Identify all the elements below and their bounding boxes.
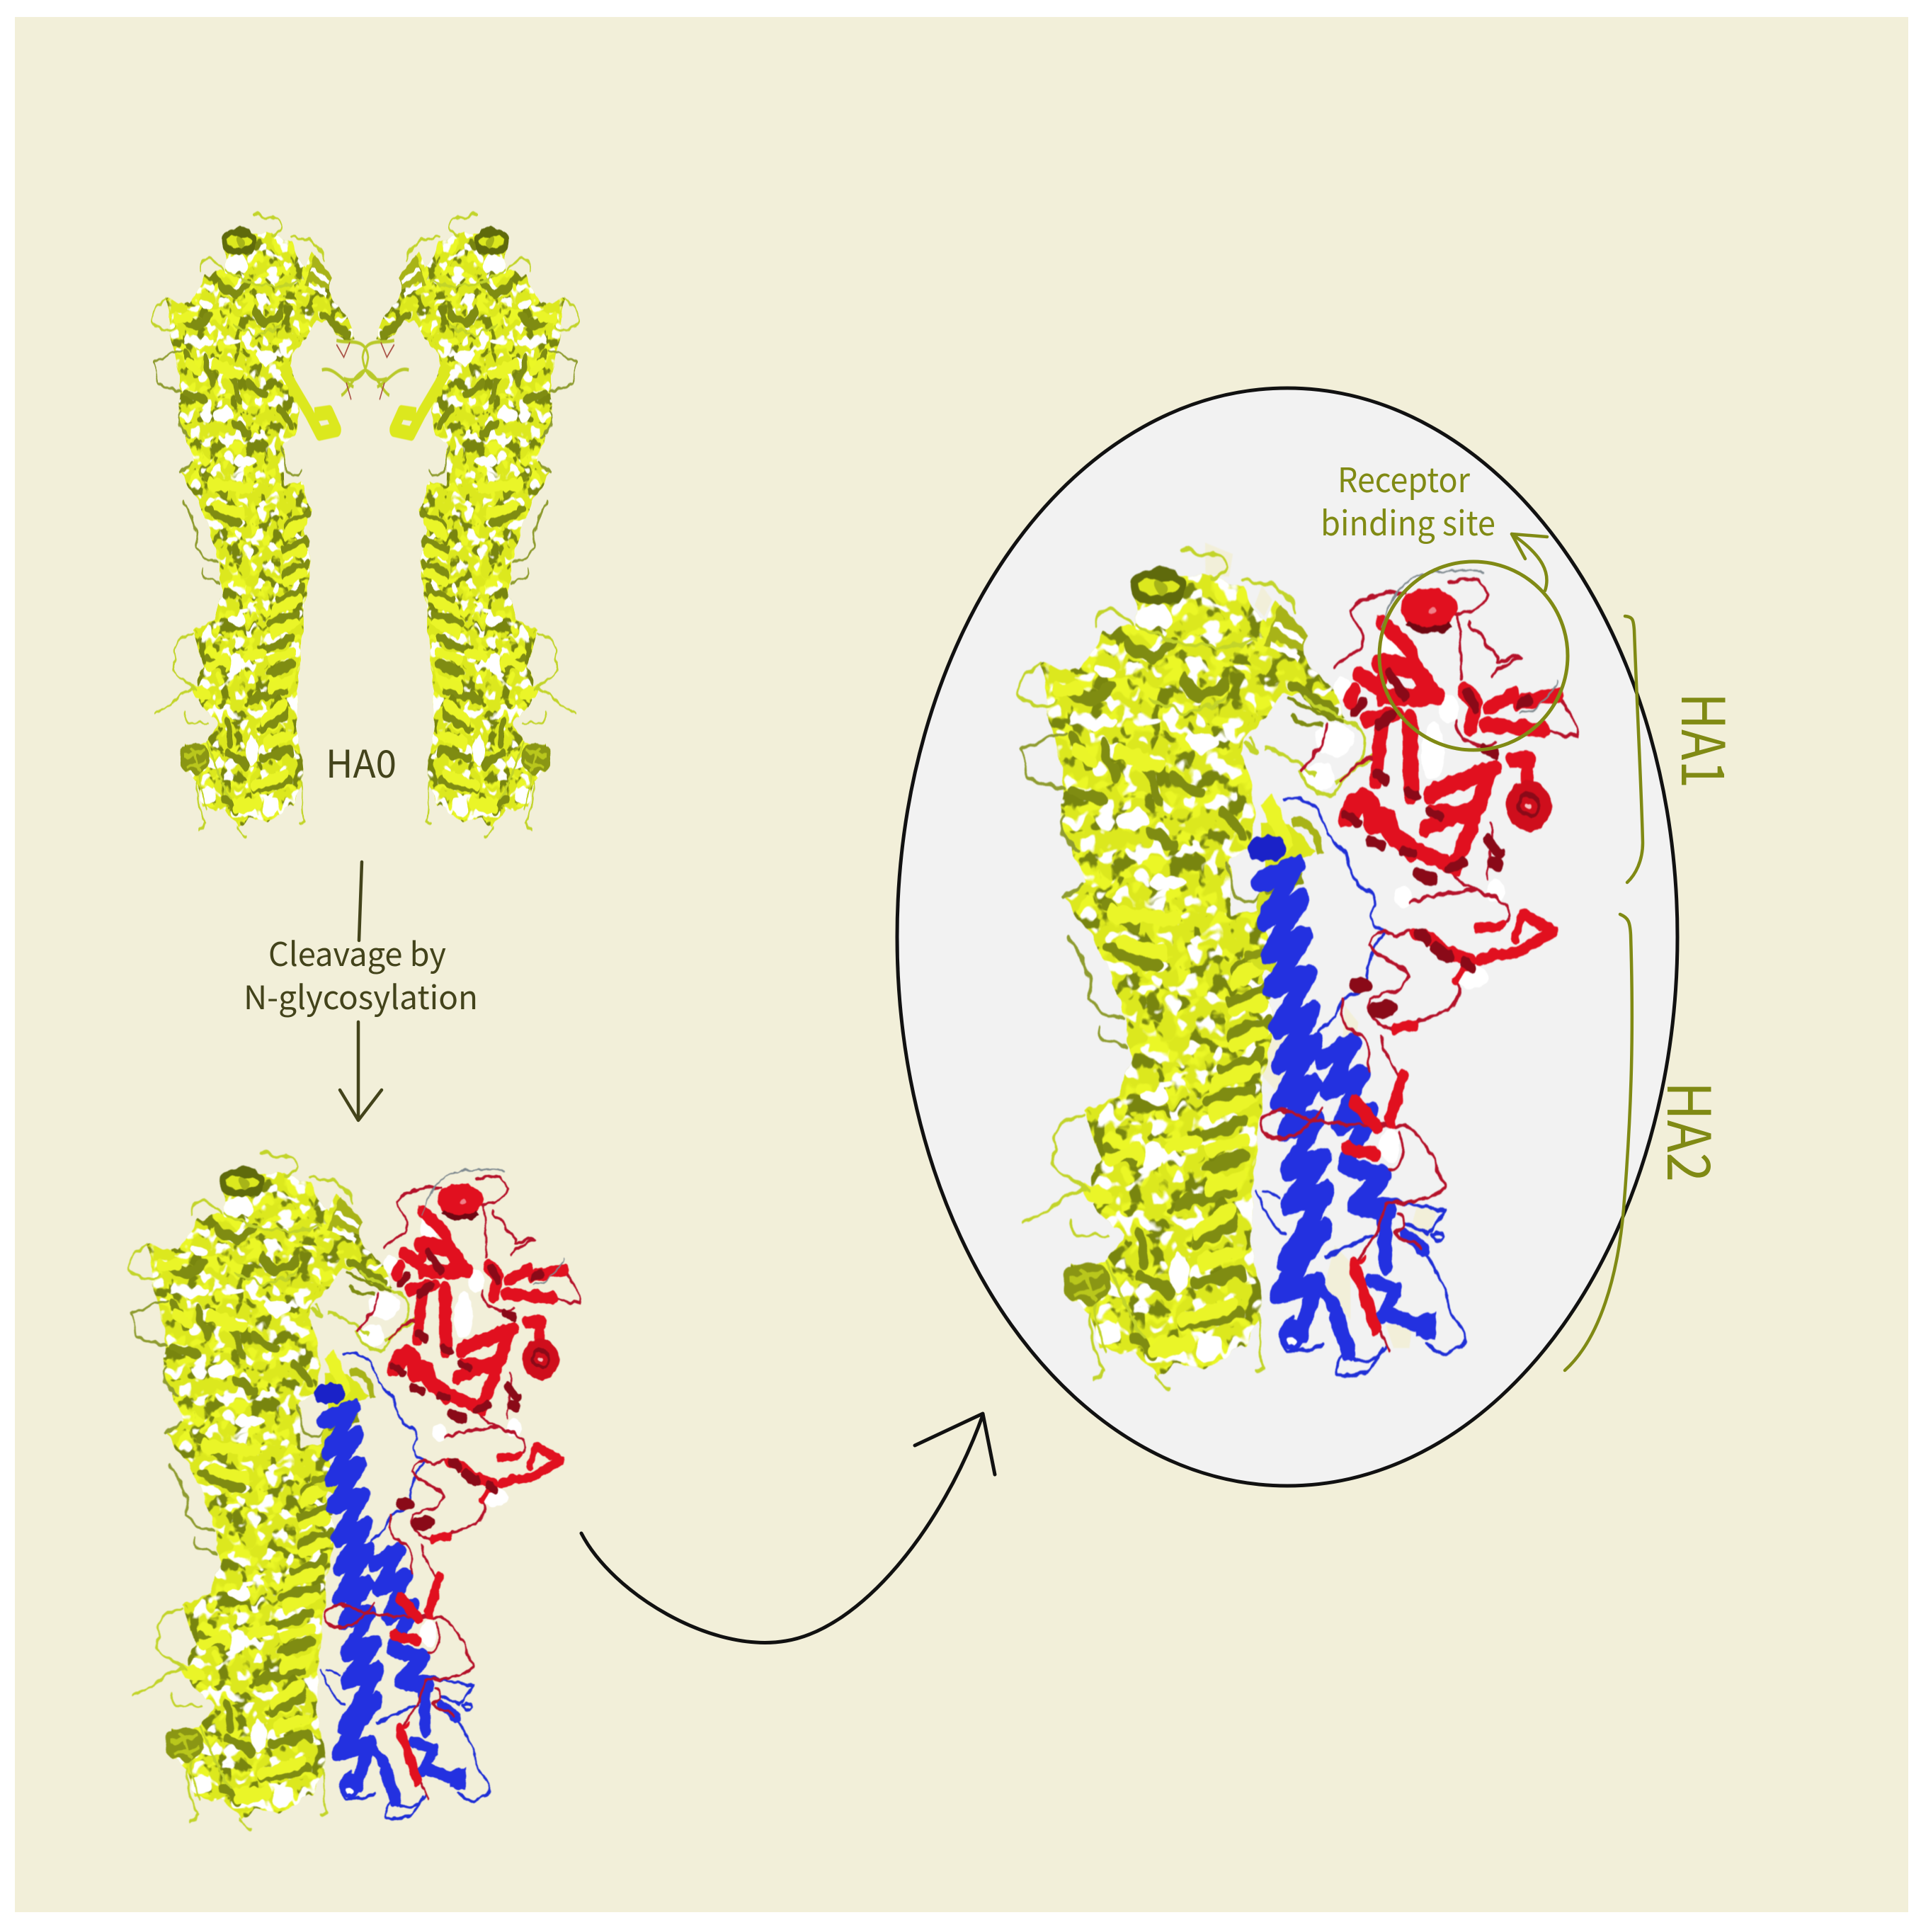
protein: cleaved HA small (128, 1152, 581, 1829)
bracket: HA1 (1625, 616, 1643, 882)
label: cleavage by N-glycosylation: N-glycosylation (244, 972, 478, 1019)
label: receptor binding site: Receptor (1338, 453, 1470, 502)
label: HA2: HA2 (1650, 1081, 1735, 1182)
label: receptor binding site (1321, 453, 1495, 545)
panel: enlarged ellipse (897, 388, 1677, 1486)
protein: HA0 uncleaved right chain (363, 213, 579, 836)
protein: HA0 uncleaved left chain (152, 213, 368, 836)
label: HA0: HA0 (326, 733, 397, 789)
protein: cleaved HA enlarged (1017, 542, 1578, 1388)
arrow: cleavage step (340, 862, 382, 1120)
label: cleavage by N-glycosylation (244, 929, 478, 1019)
label: receptor binding site: binding site (1321, 496, 1495, 545)
label: cleavage by N-glycosylation: Cleavage by (268, 929, 446, 976)
callout: receptor binding site circle (1379, 562, 1568, 750)
arrow: curved to enlarged view (581, 1414, 995, 1642)
label: HA1: HA1 (1664, 693, 1750, 788)
bracket: HA2 (1565, 914, 1632, 1370)
arrow: receptor binding site pointer (1512, 534, 1547, 591)
